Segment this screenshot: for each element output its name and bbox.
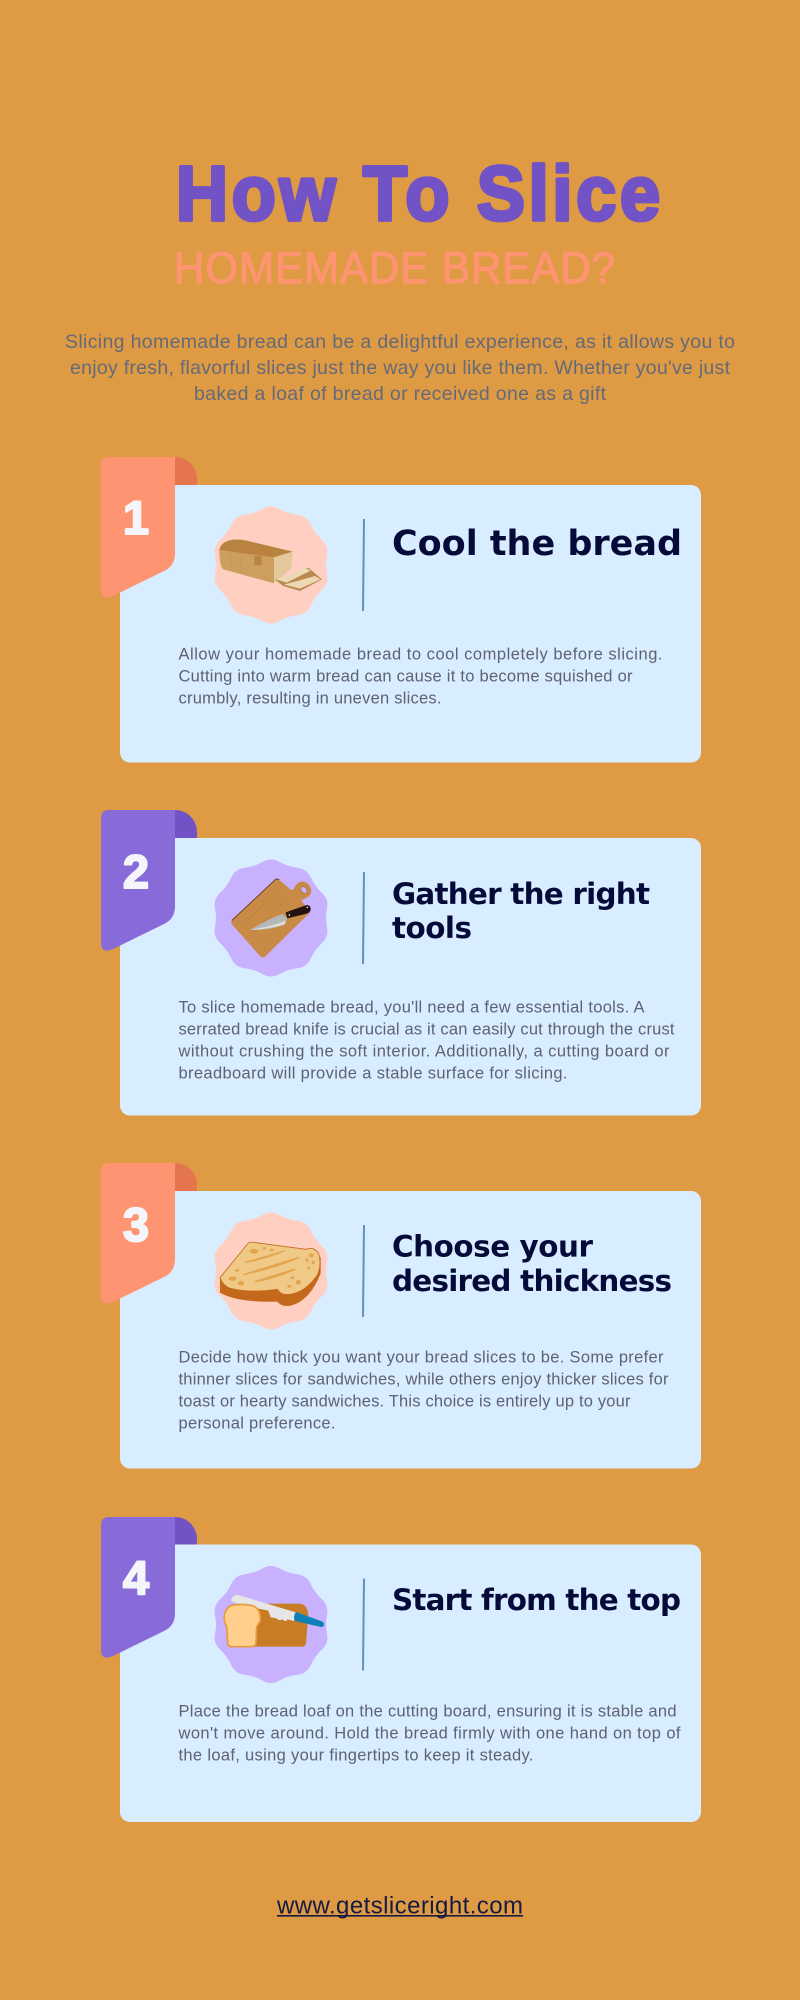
ribbon fold 2 [175, 810, 197, 843]
intro text block: enjoy fresh, flavorful slices just the way you like them. Whether you've just [70, 357, 731, 379]
heading 1: Cool the bread [392, 524, 682, 564]
body text 2: without crushing the soft interior. Additionally, a cutting board or [178, 1042, 670, 1060]
body text 4: Place the bread loaf on the cutting board, ensuring it is stable and [178, 1702, 676, 1720]
panel: step 2 gather the right tools [101, 810, 701, 1116]
body text 4 [178, 1702, 681, 1764]
number tab 4: 4 [123, 1551, 149, 1604]
ribbon fold 1 [175, 457, 197, 490]
body text 2: serrated bread knife is crucial as it can easily cut through the crust [178, 1020, 675, 1038]
panel: step 3 choose your desired thickness [101, 1163, 701, 1468]
body text 1: crumbly, resulting in uneven slices. [178, 690, 442, 708]
heading 2: tools [392, 911, 472, 945]
heading 3: desired thickness [392, 1264, 672, 1298]
panel: step 1 cool the bread [101, 457, 701, 762]
card 1 background [120, 485, 701, 762]
panel: step 4 start from the top [101, 1517, 701, 1822]
number tab 3 [101, 1163, 175, 1304]
body text 2: breadboard will provide a stable surface for slicing. [178, 1064, 568, 1082]
divider 4 [363, 1578, 364, 1670]
body text 4: the loaf, using your fingertips to keep it steady. [178, 1746, 534, 1764]
heading 2 [392, 877, 650, 945]
body text 3 [178, 1348, 669, 1432]
heading 3: Choose your [392, 1230, 594, 1264]
ribbon fold 4 [175, 1517, 197, 1550]
intro text block [65, 331, 735, 405]
divider 1 [363, 519, 364, 611]
heading 3 [392, 1230, 672, 1298]
body text 1: Cutting into warm bread can cause it to become squished or [178, 668, 633, 686]
card 2 background [120, 838, 701, 1116]
divider 2 [363, 872, 364, 964]
icon: bread loaf [215, 507, 327, 623]
body text 3: Decide how thick you want your bread slices to be. Some prefer [178, 1348, 664, 1366]
number tab 1 [101, 457, 175, 598]
divider 3 [363, 1225, 364, 1317]
subtitle: HOMEMADE BREAD? [174, 244, 615, 293]
number tab 2: 2 [123, 845, 149, 898]
body text 3: toast or hearty sandwiches. This choice is entirely up to your [178, 1392, 631, 1410]
footer link: www.getsliceright.com [276, 1892, 523, 1920]
body text 1: Allow your homemade bread to cool completely before slicing. [178, 646, 662, 664]
body text 3: personal preference. [178, 1414, 336, 1432]
icon: toast slice [215, 1213, 327, 1329]
card 4 background [120, 1544, 701, 1822]
body text 1 [178, 646, 662, 708]
title: How To Slice [176, 151, 660, 237]
body text 2: To slice homemade bread, you'll need a few essential tools. A [178, 998, 644, 1016]
heading 4: Start from the top [392, 1583, 681, 1617]
body text 4: won't move around. Hold the bread firmly with one hand on top of [178, 1724, 681, 1742]
intro text block: baked a loaf of bread or received one as a gift [194, 383, 607, 405]
body text 2 [178, 998, 675, 1082]
number tab 2 [101, 810, 175, 951]
body text 3: thinner slices for sandwiches, while others enjoy thicker slices for [178, 1370, 669, 1388]
number tab 3: 3 [123, 1198, 149, 1251]
heading 2: Gather the right [392, 877, 650, 911]
card 3 background [120, 1191, 701, 1468]
ribbon fold 3 [175, 1163, 197, 1196]
intro text block: Slicing homemade bread can be a delightful experience, as it allows you to [65, 331, 735, 353]
number tab 4 [101, 1517, 175, 1658]
icon: cutting board and knife [215, 860, 327, 976]
number tab 1: 1 [123, 491, 149, 544]
icon: bread loaf with knife [215, 1566, 327, 1683]
